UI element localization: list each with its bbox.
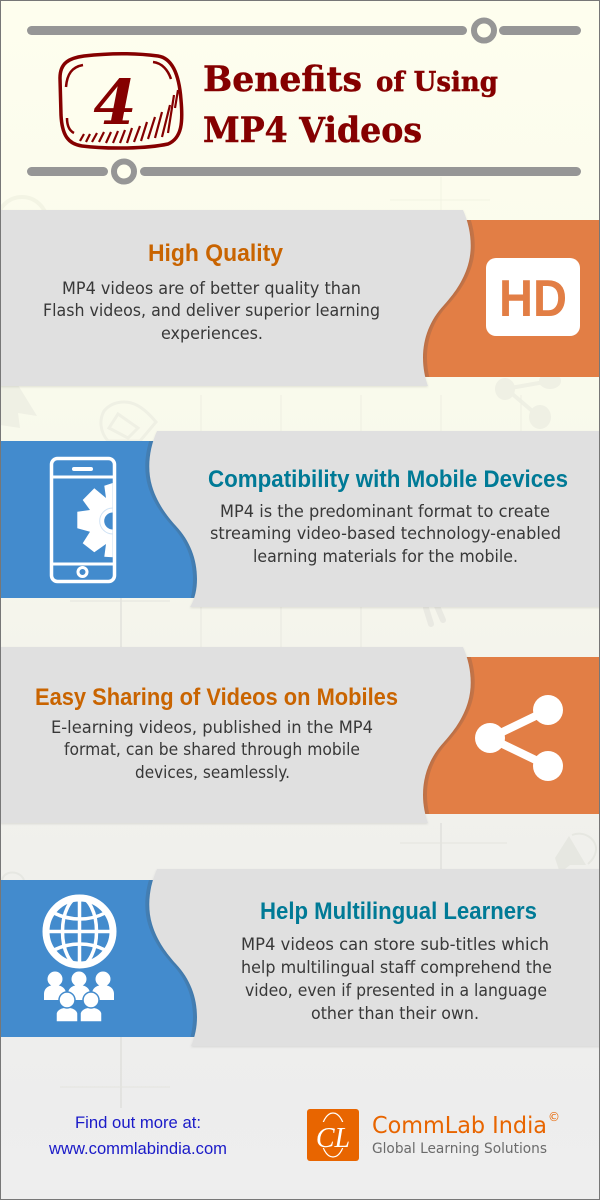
title: of Using: [376, 67, 498, 98]
heading: high quality: High Quality: [148, 240, 284, 267]
title: Benefits: [203, 59, 362, 100]
text: easy sharing: E-learning videos, published in the MP4: [51, 718, 373, 737]
footer link: [48, 1113, 227, 1158]
icon: HD: [486, 258, 580, 336]
logo: CommLab India: CommLab India: [372, 1113, 547, 1139]
text: multilingual learners: [241, 935, 552, 1023]
logo: CommLab India: ©: [548, 1110, 560, 1124]
panel: high quality: [0, 210, 600, 386]
text: multilingual learners: MP4 videos can store sub-titles which: [241, 935, 549, 954]
title badge with number 4: [60, 54, 182, 148]
heading: mobile compatibility: Compatibility with Mobile Devices: [208, 466, 568, 493]
bottom slider bar: [27, 162, 581, 182]
logo: CommLab India: CL: [316, 1123, 350, 1154]
icon: phone with gear: [52, 458, 114, 582]
icon: share: [475, 695, 563, 781]
top slider bar: [27, 20, 581, 40]
text: multilingual learners: video, even if presented in a language: [245, 981, 547, 1000]
text: multilingual learners: other than their own.: [311, 1004, 479, 1023]
text: high quality: Flash videos, and deliver superior learning: [43, 301, 380, 320]
heading: easy sharing: Easy Sharing of Videos on Mobiles: [35, 684, 398, 711]
logo: CommLab India: [307, 1109, 560, 1161]
footer link: Find out more at:: [75, 1113, 201, 1132]
text: easy sharing: format, can be shared through mobile: [64, 740, 360, 759]
text: mobile compatibility: learning materials for the mobile.: [253, 547, 518, 566]
panel: easy sharing: [0, 647, 600, 823]
text: mobile compatibility: streaming video-based technology-enabled: [210, 524, 561, 543]
panel: multilingual learners: [0, 869, 600, 1046]
text: mobile compatibility: MP4 is the predominant format to create: [220, 502, 550, 521]
title badge with number 4: 4: [93, 66, 137, 139]
heading: multilingual learners: Help Multilingual Learners: [260, 898, 537, 925]
panel: mobile compatibility: [0, 431, 600, 607]
text: easy sharing: [51, 718, 373, 782]
text: mobile compatibility: [210, 502, 561, 566]
footer link: www.commlabindia.com: [48, 1139, 227, 1158]
title: [203, 59, 498, 151]
text: easy sharing: devices, seamlessly.: [135, 763, 290, 782]
title: MP4 Videos: [203, 110, 422, 151]
logo: CommLab India: Global Learning Solutions: [372, 1141, 547, 1157]
text: high quality: experiences.: [161, 324, 263, 343]
text: high quality: MP4 videos are of better quality than: [62, 279, 361, 298]
text: multilingual learners: help multilingual staff comprehend the: [241, 958, 552, 977]
background watermark pattern: [0, 177, 596, 1108]
text: high quality: [43, 279, 380, 343]
icon: globe and people: [44, 898, 114, 1022]
icon: HD: HD: [499, 270, 567, 328]
